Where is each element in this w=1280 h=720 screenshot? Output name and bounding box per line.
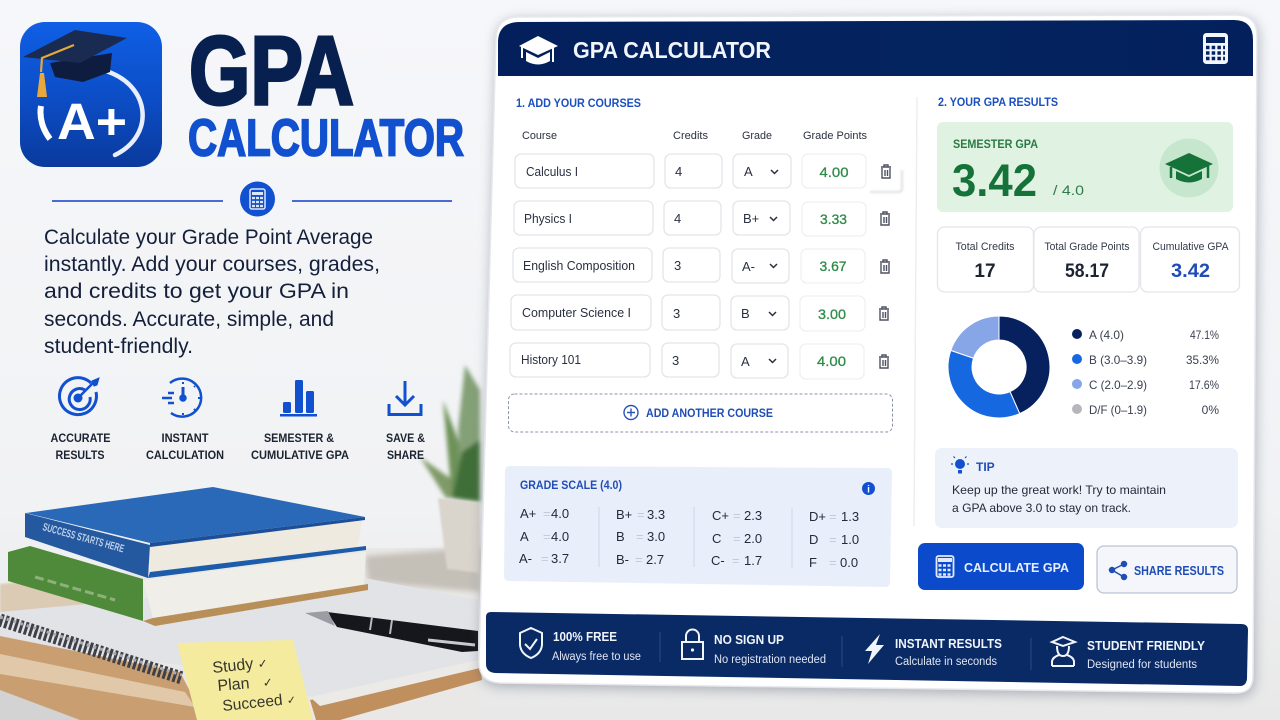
icon: share — [1110, 562, 1126, 580]
course row: English Composition: 3.67 — [820, 258, 847, 274]
course row: Computer Science I: Computer Science I — [522, 305, 631, 320]
panel: grade scale: B+ — [616, 507, 632, 522]
description text — [44, 226, 380, 358]
sticky note: Succeed ✓ — [222, 690, 297, 715]
donut legend: 17.6% — [1189, 378, 1219, 392]
panel: grade scale: GRADE SCALE (4.0) — [520, 480, 622, 492]
panel: tip: TIP — [976, 460, 995, 474]
plant pot — [438, 498, 480, 573]
panel: grade scale: 0.0 — [840, 555, 858, 570]
panel: grade scale: D — [809, 532, 818, 547]
panel: grade scale: 2.3 — [744, 508, 762, 523]
feature: semester and cumulative gpa: CUMULATIVE GPA — [251, 448, 349, 462]
course row: English Composition: A- — [742, 259, 755, 274]
feature: semester and cumulative gpa — [251, 380, 349, 462]
donut legend — [1072, 328, 1219, 417]
pen — [305, 611, 478, 652]
panel: tip — [935, 448, 1238, 528]
table surface — [0, 548, 480, 720]
donut legend: A (4.0) — [1089, 328, 1124, 342]
icon: trash — [881, 165, 891, 178]
icon: info — [862, 482, 875, 496]
footer item: student friendly: Designed for students — [1087, 659, 1197, 671]
column divider — [914, 97, 917, 526]
icon: student — [1052, 637, 1075, 666]
panel: grade scale: = — [733, 531, 741, 546]
footer item: no sign up: NO SIGN UP — [714, 632, 784, 647]
panel: grade scale: B- — [616, 552, 629, 567]
panel: grade scale: = — [543, 529, 551, 544]
course row: Computer Science I: 3 — [673, 306, 680, 321]
course row: Physics I: Physics I — [524, 211, 572, 226]
description text: student-friendly. — [44, 335, 193, 358]
course row: History 101: A — [741, 354, 750, 369]
button: calculate gpa — [918, 543, 1084, 590]
icon: trash — [880, 212, 890, 225]
course row: English Composition: 3 — [674, 258, 681, 273]
panel: grade scale: = — [829, 555, 837, 570]
icon: calculator — [1203, 33, 1228, 64]
icon: clock — [162, 379, 201, 417]
title: CALCULATOR — [188, 110, 464, 168]
panel: grade scale: B — [616, 529, 625, 544]
feature: semester and cumulative gpa: SEMESTER & — [264, 431, 334, 445]
description text: and credits to get your GPA in — [44, 280, 349, 303]
feature: instant calculation: CALCULATION — [146, 448, 224, 462]
panel: grade scale: A — [520, 529, 529, 544]
panel: tip: Keep up the great work! Try to maintain — [952, 483, 1166, 497]
stat: total grade points — [1034, 227, 1139, 292]
panel: grade scale: = — [635, 552, 643, 567]
blue book — [25, 487, 366, 578]
table column headers: Grade — [742, 130, 772, 142]
course row: Physics I: 3.33 — [820, 211, 847, 227]
feature: save and share: SAVE & — [386, 431, 425, 445]
course row: History 101: 3 — [672, 353, 679, 368]
feature: instant calculation: INSTANT — [162, 431, 209, 445]
stat: total credits — [938, 227, 1034, 292]
icon: graduation cap — [519, 36, 558, 64]
footer item: no sign up: No registration needed — [714, 654, 826, 666]
table column headers: Course — [522, 130, 557, 142]
icon: shield — [520, 628, 542, 658]
shadow on table — [365, 547, 480, 592]
footer item: 100% free: Always free to use — [552, 651, 641, 663]
panel: calculator app — [479, 15, 1257, 693]
icon: lightning bolt — [865, 634, 884, 664]
course row: Physics I — [514, 201, 890, 236]
button: add another course: ADD ANOTHER COURSE — [646, 406, 773, 420]
green book — [8, 546, 368, 626]
panel: grade scale: 3.3 — [647, 507, 665, 522]
logo A+: A+ — [57, 93, 127, 150]
icon: graduation cap badge — [1160, 138, 1218, 198]
divider with calculator icon — [52, 182, 452, 216]
course row: History 101: 4.00 — [817, 353, 846, 369]
icon: target — [59, 378, 99, 415]
notebook lower pages — [0, 636, 205, 720]
course row: History 101 — [510, 343, 889, 379]
panel: grade scale: D+ — [809, 509, 826, 524]
button: add another course — [508, 394, 892, 432]
icon: light bulb — [951, 456, 969, 474]
panel: grade scale: A- — [519, 551, 532, 566]
feature: accurate results — [50, 378, 110, 462]
notebook paper — [0, 578, 478, 705]
description text: instantly. Add your courses, grades, — [44, 253, 380, 276]
panel header: GPA CALCULATOR — [573, 37, 771, 63]
table column headers — [522, 130, 867, 142]
panel: grade scale: = — [543, 506, 551, 521]
footer item: no sign up — [682, 630, 826, 666]
course row: Computer Science I: 3.00 — [818, 306, 846, 322]
panel: grade scale: 2.7 — [646, 552, 664, 567]
icon: download — [389, 381, 421, 414]
icon: calculator — [936, 556, 954, 577]
stat: total credits: 17 — [974, 261, 996, 282]
feature: instant calculation — [146, 379, 224, 462]
panel: grade scale: A+ — [520, 506, 536, 521]
notebook spiral — [0, 617, 182, 678]
icon: lock — [682, 630, 703, 659]
course row: Computer Science I — [511, 295, 889, 331]
donut legend: 47.1% — [1190, 328, 1219, 342]
footer item: student friendly — [1052, 637, 1205, 671]
logo arc — [106, 71, 143, 155]
card: semester gpa: 3.42 — [952, 155, 1037, 206]
feature: accurate results: ACCURATE — [50, 431, 110, 445]
panel header — [498, 20, 1253, 76]
table column headers: Grade Points — [803, 130, 867, 142]
panel: grade scale: C- — [711, 553, 725, 568]
feature: save and share: SHARE — [387, 448, 424, 462]
feature: save and share — [386, 381, 425, 462]
panel: grade scale: = — [829, 532, 837, 547]
sticky note: Study ✓ — [212, 654, 269, 677]
section heading: add your courses: 1. ADD YOUR COURSES — [516, 98, 641, 110]
card: semester gpa: / 4.0 — [1053, 183, 1084, 198]
photo: desk with books, notebook, pen, plant and sticky note — [0, 365, 482, 720]
panel: grade scale — [504, 466, 892, 587]
feature: accurate results: RESULTS — [56, 448, 104, 462]
panel: grade scale: 1.0 — [841, 532, 859, 547]
button: calculate gpa: CALCULATE GPA — [964, 561, 1069, 575]
panel: grade scale: 2.0 — [744, 531, 762, 546]
donut legend: 35.3% — [1186, 353, 1219, 367]
button: share results — [1097, 546, 1237, 593]
panel card — [479, 15, 1257, 693]
panel: grade scale: 1.3 — [841, 509, 859, 524]
footer band — [486, 612, 1248, 686]
section heading: your gpa results: 2. YOUR GPA RESULTS — [938, 97, 1058, 109]
donut legend: C (2.0–2.9) — [1089, 378, 1147, 392]
panel: grade scale: = — [732, 553, 740, 568]
stat: cumulative gpa: 3.42 — [1171, 261, 1210, 282]
panel: grade scale: = — [541, 551, 549, 566]
footer item: instant results — [865, 634, 1002, 668]
description text: seconds. Accurate, simple, and — [44, 308, 334, 331]
course row: Calculus I: 4 — [675, 164, 682, 179]
footer item: instant results: INSTANT RESULTS — [895, 636, 1002, 651]
panel: grade scale: C+ — [712, 508, 729, 523]
panel: grade scale: = — [636, 529, 644, 544]
course row: History 101: History 101 — [521, 352, 581, 367]
sticky note — [177, 640, 313, 720]
icon: trash — [880, 260, 890, 273]
course row: Physics I: B+ — [743, 211, 759, 226]
icon: bar chart — [280, 380, 317, 416]
description text: Calculate your Grade Point Average — [44, 226, 373, 249]
table column headers: Credits — [673, 130, 709, 142]
panel: grade scale: 3.0 — [647, 529, 665, 544]
donut legend: B (3.0–3.9) — [1089, 353, 1147, 367]
panel: grade scale: 4.0 — [551, 506, 569, 521]
course row: Physics I: 4 — [674, 211, 681, 226]
footer item: 100% free: 100% FREE — [553, 629, 617, 644]
panel: grade scale: = — [733, 508, 741, 523]
icon: trash — [879, 355, 889, 368]
panel: grade scale: 1.7 — [744, 553, 762, 568]
footer item: student friendly: STUDENT FRIENDLY — [1087, 638, 1205, 653]
course row: Calculus I: A — [744, 164, 753, 179]
app logo — [20, 22, 162, 167]
course row: English Composition — [513, 248, 890, 283]
panel: grade scale: 4.0 — [551, 529, 569, 544]
panel: grade scale: 3.7 — [551, 551, 569, 566]
stat: cumulative gpa — [1140, 227, 1240, 292]
course row: Calculus I: Calculus I — [526, 164, 578, 179]
icon: info: i — [867, 484, 870, 496]
stat: total grade points: 58.17 — [1065, 261, 1109, 282]
donut legend: 0% — [1202, 403, 1219, 417]
panel: grade scale: F — [809, 555, 817, 570]
tan desk edge — [0, 580, 145, 625]
panel: grade scale: = — [829, 509, 837, 524]
panel: tip: a GPA above 3.0 to stay on track. — [952, 501, 1131, 515]
logo cap — [23, 30, 127, 97]
course row: Computer Science I: B — [741, 306, 750, 321]
course row: English Composition: English Composition — [523, 258, 635, 273]
panel: grade scale: = — [637, 507, 645, 522]
course row: Calculus I — [515, 154, 902, 192]
title: GPA — [189, 16, 354, 125]
button: share results: SHARE RESULTS — [1134, 564, 1224, 578]
donut legend: D/F (0–1.9) — [1089, 403, 1147, 417]
stat: total credits: Total Credits — [956, 241, 1015, 253]
card: semester gpa: SEMESTER GPA — [953, 137, 1038, 151]
sticky note: Plan ✓ — [217, 673, 274, 695]
stat: total grade points: Total Grade Points — [1044, 241, 1130, 253]
stat: cumulative gpa: Cumulative GPA — [1152, 241, 1229, 253]
title — [188, 16, 464, 168]
footer item: instant results: Calculate in seconds — [895, 656, 997, 668]
plant — [420, 365, 480, 502]
footer item: 100% free — [520, 628, 641, 663]
blue book: SUCCESS STARTS HERE — [41, 521, 125, 555]
donut chart — [948, 316, 1050, 418]
card: semester gpa — [937, 122, 1233, 212]
panel: grade scale: C — [712, 531, 721, 546]
icon: trash — [879, 307, 889, 320]
course row: Calculus I: 4.00 — [820, 164, 849, 180]
